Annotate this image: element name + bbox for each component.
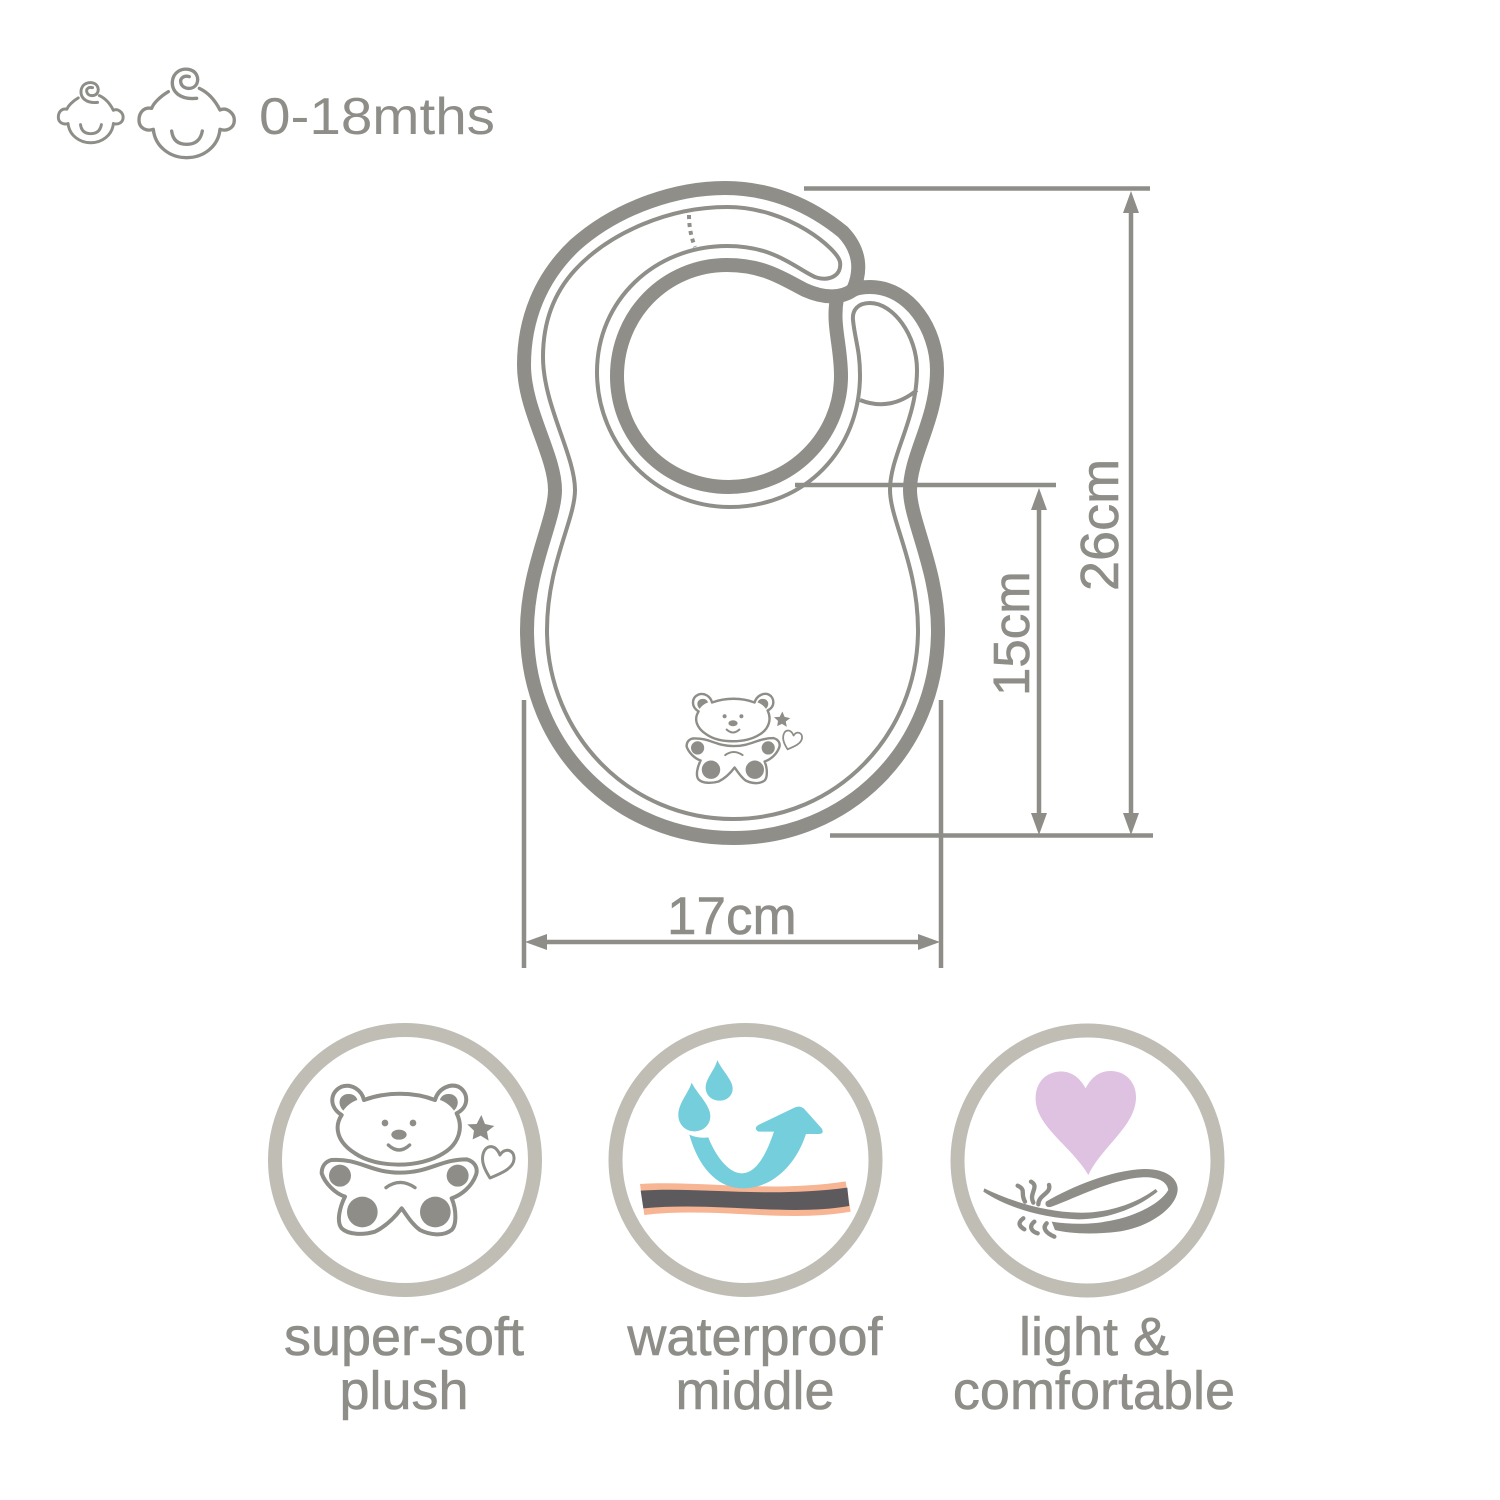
feature label line 2: comfortable (953, 1361, 1235, 1421)
age range label: 0-18mths (259, 88, 495, 146)
height 26cm label: 26cm (1070, 459, 1130, 591)
icon: large baby face (139, 69, 234, 158)
feature: light and comfortable (953, 1030, 1235, 1421)
feature ring (275, 1030, 535, 1290)
feature label: waterproof (626, 1307, 884, 1367)
height 15cm label: 15cm (983, 571, 1040, 696)
feature ring (958, 1030, 1218, 1290)
width 17cm label: 17cm (667, 887, 797, 946)
bib strap fold arc (860, 390, 917, 404)
dimension arrows (525, 191, 1139, 950)
bib inner stitching line (543, 207, 918, 819)
bear logo on bib (687, 694, 802, 783)
bib outer edge (524, 188, 938, 838)
icon: teddy bear (322, 1086, 514, 1234)
feature label line 2: plush (339, 1361, 469, 1421)
bib outline drawing (524, 188, 938, 838)
feature label line 2: middle (675, 1361, 835, 1421)
feature label: super-soft (284, 1307, 524, 1367)
icon: water repelled from fabric layers (640, 1060, 851, 1216)
dimension guide lines (524, 188, 1153, 968)
bib dotted fastener line (689, 215, 695, 247)
icon: small baby face (58, 83, 123, 143)
feature: waterproof middle (616, 1030, 884, 1421)
dimensions (524, 188, 1153, 968)
icon: heart above feather (983, 1071, 1178, 1237)
feature: super-soft plush (275, 1030, 535, 1421)
feature label: light & (1019, 1307, 1169, 1367)
bib neck ring (617, 265, 853, 487)
feature ring (616, 1030, 876, 1290)
